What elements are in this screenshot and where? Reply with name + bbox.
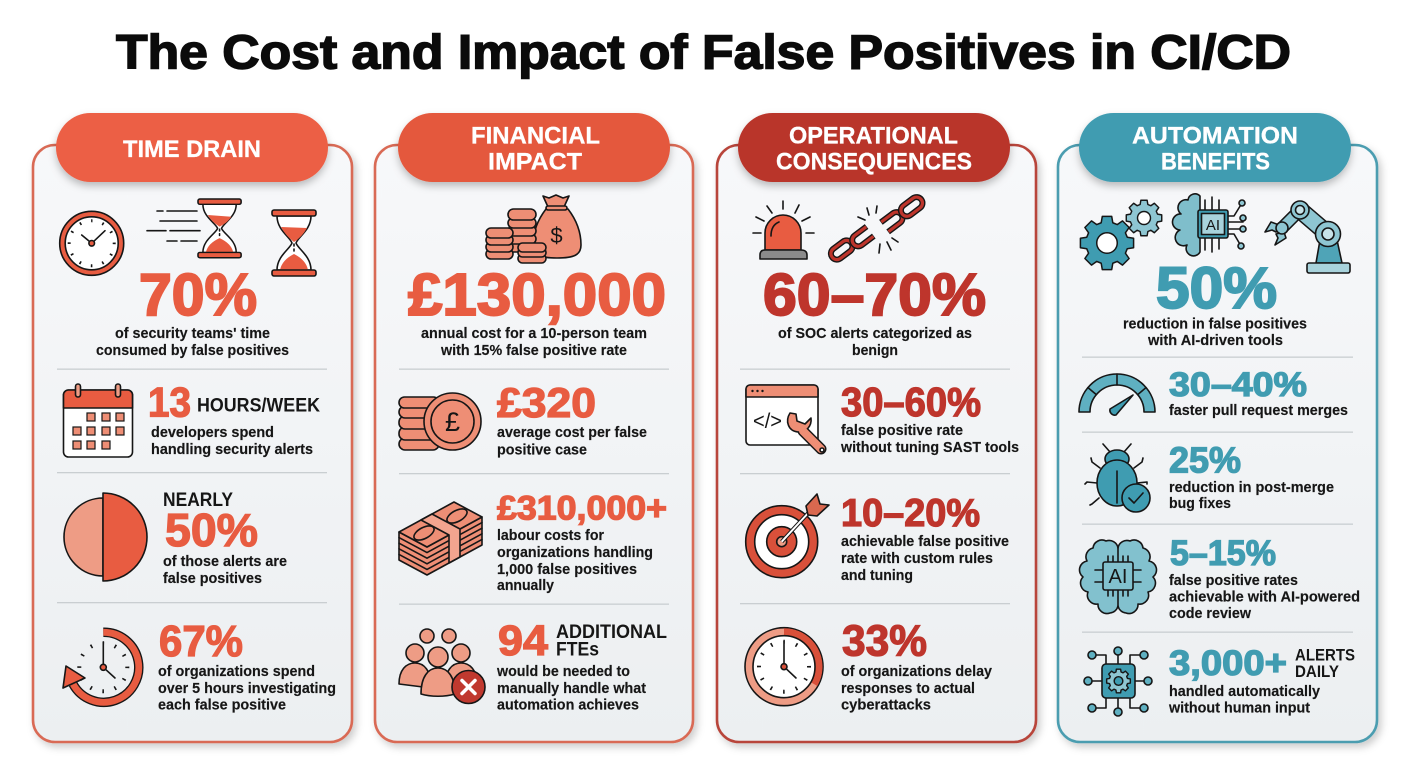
stat: nearly 50%: false positives (163, 571, 262, 587)
stat: £310,000+: organizations handling (497, 545, 653, 561)
stat: 10-20%: and tuning (841, 568, 913, 584)
icon: pound coin stack: £ (445, 407, 460, 437)
stat: 3,000+ alerts daily: ALERTS (1295, 646, 1355, 665)
stat: 94 additional FTEs: manually handle what (497, 681, 646, 697)
stat: 30-40%: 30–40% (1169, 366, 1307, 404)
stat: 25%: 25% (1169, 440, 1241, 481)
stat: 94 additional FTEs (496, 617, 667, 714)
stat: nearly 50%: of those alerts are (163, 554, 287, 570)
icon: calendar (64, 384, 132, 457)
stat: 13 hours/week: HOURS/WEEK (197, 396, 320, 416)
stat: 67%: 67% (159, 617, 243, 666)
stat: 60-70%: 60–70% (763, 262, 986, 328)
stat: £320 (497, 379, 647, 458)
stat: 3,000+ alerts daily: 3,000+ (1169, 644, 1287, 683)
stat: 60-70% (763, 262, 986, 359)
icon: hourglass with speed lines (147, 199, 241, 258)
stat: 94 additional FTEs: FTEs (556, 640, 599, 660)
icon: AI chip brain: AI (1206, 217, 1220, 234)
stat: £310,000+: 1,000 false positives (497, 562, 637, 578)
icon: wall clock (60, 211, 124, 275)
icon: pound coin stack (399, 393, 481, 450)
stat: 13 hours/week: handling security alerts (151, 442, 313, 458)
stat: 30-40%: faster pull request merges (1169, 403, 1348, 419)
stat: 67%: of organizations spend (158, 664, 315, 680)
stat: 5-15%: false positive rates (1169, 573, 1298, 589)
stat: 30-40% (1169, 366, 1348, 419)
stat: 94 additional FTEs: would be needed to (496, 664, 630, 680)
stat: £320: £320 (497, 379, 596, 426)
icon: half pie (64, 493, 147, 581)
stat: nearly 50% (163, 490, 287, 587)
stat: £130,000 (408, 262, 666, 359)
stat: £130,000: annual cost for a 10-person team (421, 326, 647, 342)
stat: 3,000+ alerts daily: DAILY (1295, 662, 1340, 681)
heading: time drain: TIME DRAIN (123, 136, 261, 163)
stat: 94 additional FTEs: 94 (498, 617, 548, 665)
stat: 25%: bug fixes (1169, 496, 1231, 512)
stat: 67%: over 5 hours investigating (158, 681, 336, 697)
icon: team with cross badge (399, 629, 485, 704)
heading: operational consequences: CONSEQUENCES (776, 148, 972, 176)
stat: 33%: responses to actual (841, 681, 975, 697)
stat: 70%: 70% (139, 262, 257, 328)
icon: clock with counter arrow (63, 632, 139, 702)
heading: automation benefits (1079, 113, 1351, 182)
icon: coins and money bag (486, 195, 581, 263)
stat: £130,000: with 15% false positive rate (440, 343, 627, 359)
stat: 25%: reduction in post-merge (1169, 480, 1334, 496)
icon: AI brain: AI (1109, 566, 1127, 588)
heading: automation benefits: BENEFITS (1161, 148, 1270, 176)
stat: 50%: with AI-driven tools (1147, 333, 1283, 349)
stat: 25% (1169, 440, 1334, 512)
stat: 10-20%: 10–20% (841, 492, 980, 535)
stat: £130,000: £130,000 (408, 262, 666, 328)
stat: £320: positive case (497, 442, 587, 458)
stat: 94 additional FTEs: automation achieves (497, 698, 639, 714)
stat: 50% (1123, 256, 1307, 349)
stat: 60-70%: benign (852, 343, 898, 359)
stat: 30-60%: 30–60% (841, 379, 981, 425)
heading: operational consequences (738, 113, 1010, 182)
stat: 67% (158, 617, 336, 714)
stat: 30-60%: without tuning SAST tools (840, 440, 1019, 456)
panel: financial impact (375, 113, 693, 742)
icon: robot arm (1265, 201, 1350, 273)
stat: 33% (841, 616, 993, 714)
stat: 10-20% (841, 492, 1009, 584)
icon: circuit chip with gear (1084, 647, 1152, 716)
stat: 60-70%: of SOC alerts categorized as (778, 326, 972, 342)
icon: stack of banknotes (399, 502, 482, 575)
heading: time drain (56, 113, 328, 182)
stat: 10-20%: achievable false positive (841, 534, 1009, 550)
stat: 67%: each false positive (158, 698, 286, 714)
stat: 5-15%: code review (1169, 606, 1252, 622)
icon: code window with wrench: </> (753, 410, 782, 433)
icon: clock one-third ring (745, 628, 823, 706)
stat: 94 additional FTEs: ADDITIONAL (556, 622, 667, 643)
stat: nearly 50%: 50% (165, 504, 258, 556)
icon: speedometer (1079, 374, 1155, 415)
stat: 5-15% (1169, 534, 1360, 622)
panel: operational consequences (717, 113, 1036, 742)
heading: financial impact: IMPACT (488, 148, 582, 176)
stat: 13 hours/week (148, 378, 320, 458)
icon: AI brain (1079, 540, 1157, 614)
heading: financial impact: FINANCIAL (471, 122, 600, 149)
icon: bug with check (1085, 444, 1150, 512)
stat: 33%: 33% (842, 616, 927, 666)
stat: 70%: consumed by false positives (96, 343, 289, 359)
stat: 10-20%: rate with custom rules (841, 551, 993, 567)
stat: 3,000+ alerts daily: handled automatically (1169, 684, 1321, 700)
panel: time drain (33, 113, 352, 742)
icon: code window with wrench (746, 385, 824, 452)
stat: 13 hours/week: 13 (148, 378, 191, 426)
icon: siren (753, 201, 814, 259)
icon: hourglass (272, 210, 316, 276)
heading: operational consequences: OPERATIONAL (789, 122, 958, 149)
stat: £320: average cost per false (497, 425, 647, 441)
stat: 70%: of security teams' time (115, 326, 270, 342)
icon: gears (1080, 200, 1162, 270)
icon: broken chain (829, 195, 925, 262)
stat: 5-15%: achievable with AI-powered (1169, 590, 1360, 606)
heading: financial impact (398, 113, 670, 182)
stat: 33%: cyberattacks (841, 698, 931, 714)
stat: £310,000+: labour costs for (497, 528, 604, 544)
stat: 33%: of organizations delay (841, 664, 993, 680)
stat: 13 hours/week: developers spend (151, 425, 274, 441)
stat: 3,000+ alerts daily: without human input (1168, 700, 1310, 716)
stat: 50%: reduction in false positives (1123, 316, 1307, 332)
title: The Cost and Impact of False Positives in CI/CD (116, 26, 1291, 80)
heading: automation benefits: AUTOMATION (1132, 122, 1298, 149)
panel: automation benefits (1058, 113, 1377, 742)
stat: 30-60% (840, 379, 1019, 456)
stat: £310,000+: £310,000+ (497, 489, 667, 527)
stat: 70% (96, 262, 289, 359)
icon: target with arrow (746, 494, 829, 578)
stat: 3,000+ alerts daily (1168, 644, 1355, 716)
icon: AI chip brain (1172, 194, 1246, 256)
stat: 5-15%: 5–15% (1170, 534, 1276, 573)
stat: £310,000+: annually (497, 578, 555, 594)
stat: £310,000+ (497, 489, 667, 594)
stat: 50%: 50% (1156, 256, 1277, 321)
stat: 30-60%: false positive rate (841, 423, 963, 439)
stat: nearly 50%: NEARLY (163, 490, 233, 511)
icon: coins and money bag: $ (550, 223, 563, 248)
